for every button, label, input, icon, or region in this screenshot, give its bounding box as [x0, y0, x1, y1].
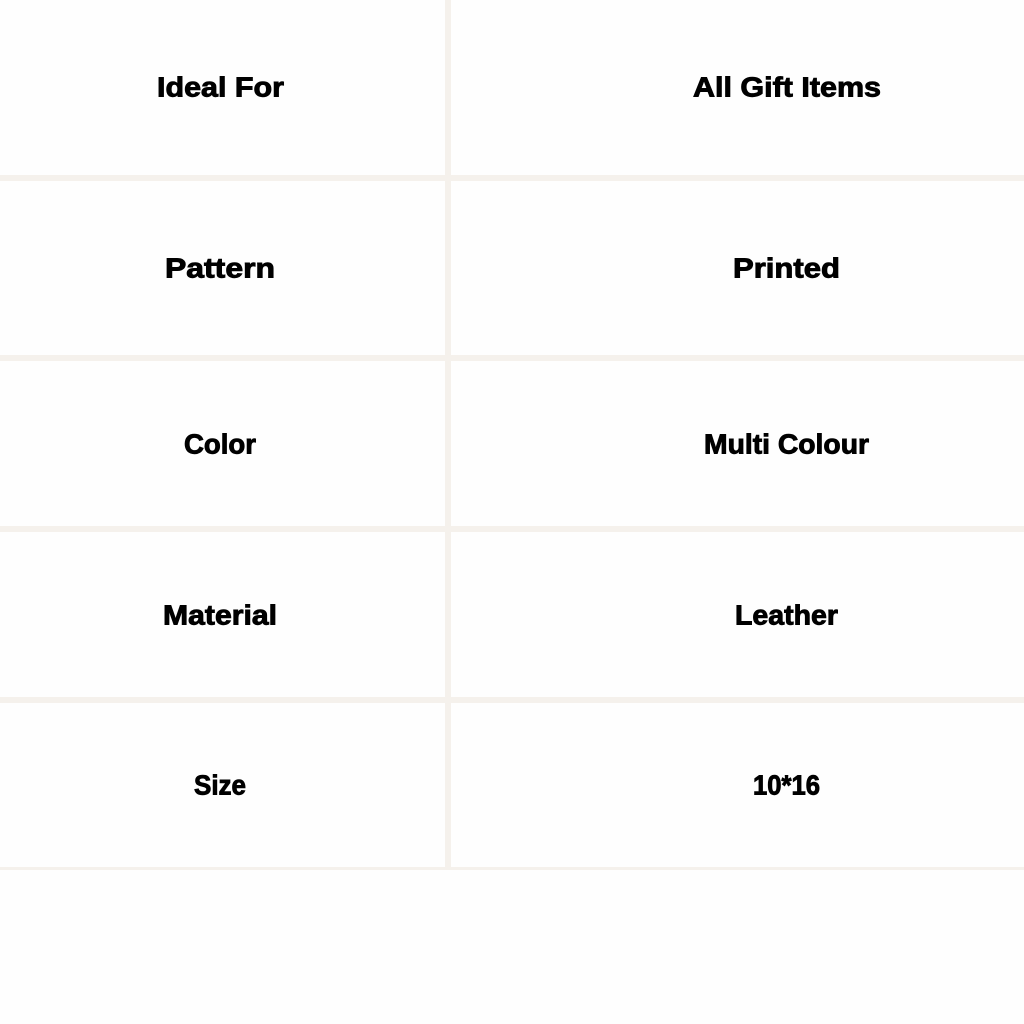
row: pattern: Pattern [165, 252, 275, 284]
row: color: Multi Colour [704, 428, 869, 460]
row: color: Color [184, 428, 256, 460]
row: color [184, 428, 869, 460]
row: material: Leather [735, 600, 838, 630]
row: size: 10*16 [753, 770, 820, 800]
row: size [194, 770, 820, 800]
row: material: Material [163, 600, 277, 630]
row: pattern [165, 252, 840, 284]
row: ideal for [157, 72, 881, 102]
row: size: Size [194, 770, 246, 800]
row: ideal for: All Gift Items [693, 72, 881, 102]
row: pattern: Printed [733, 252, 840, 284]
row: material [163, 600, 838, 630]
row: ideal for: Ideal For [157, 72, 284, 102]
